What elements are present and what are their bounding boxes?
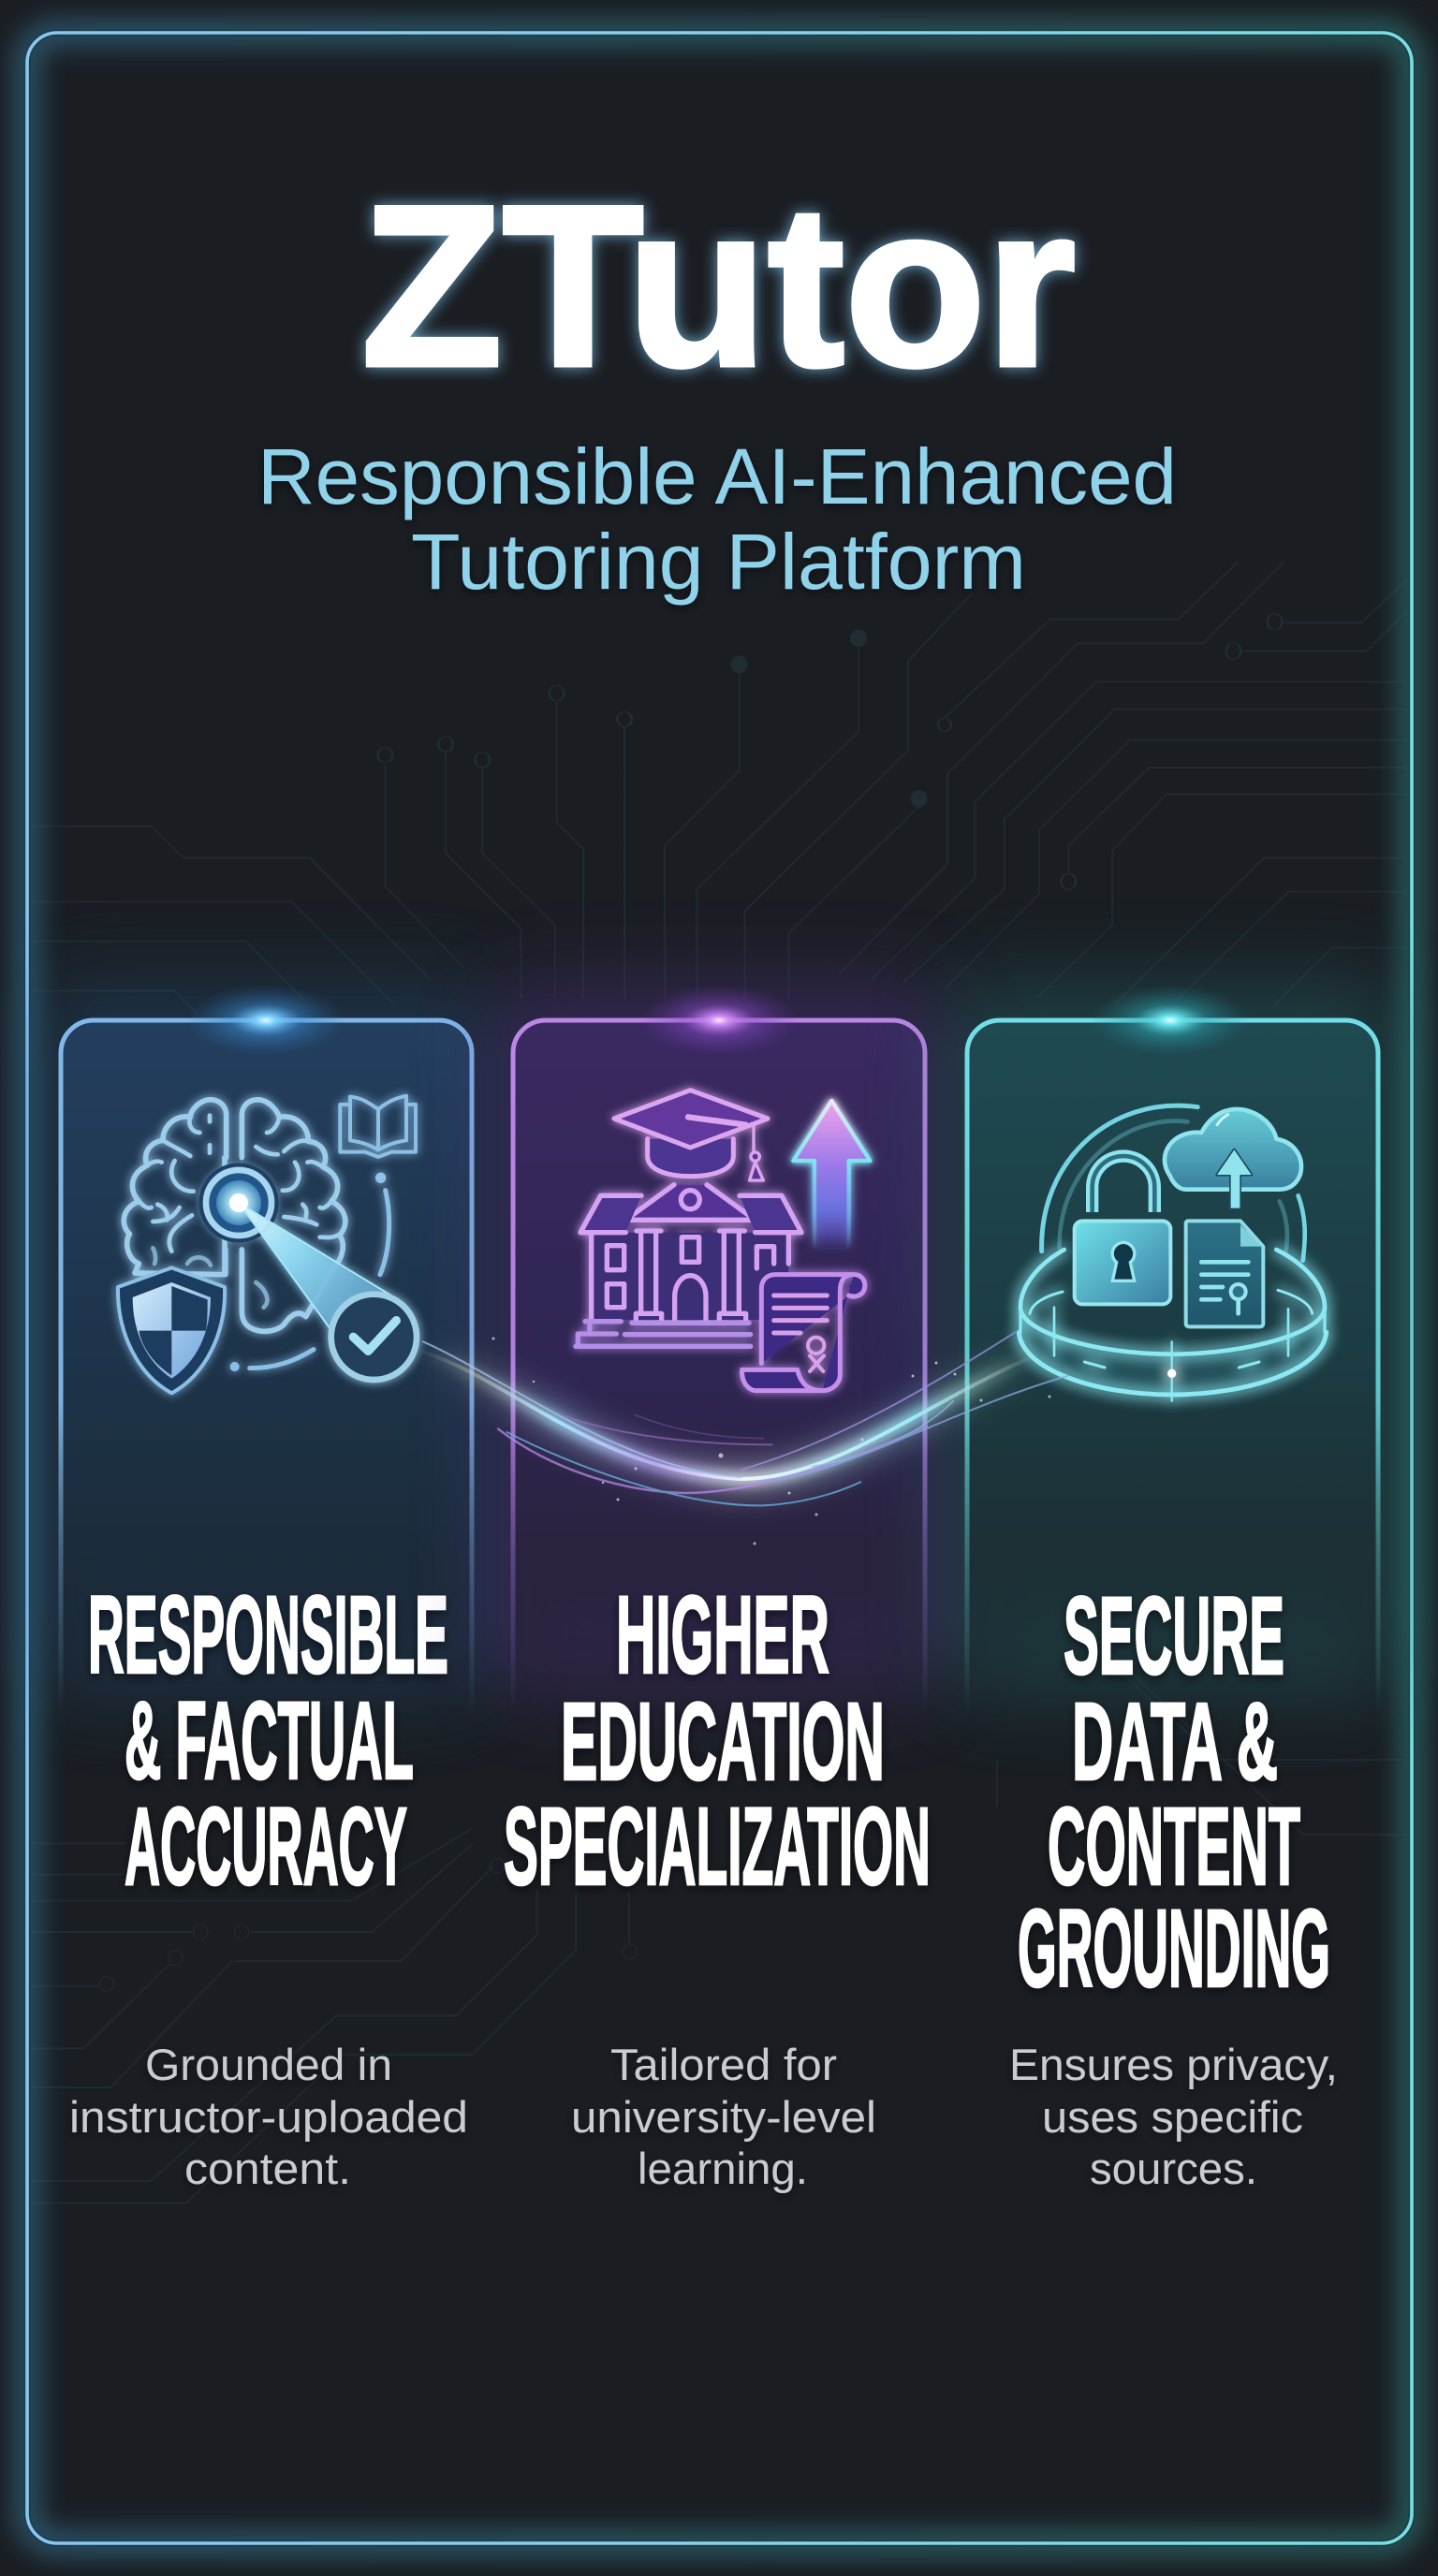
body text: sources. bbox=[1090, 2144, 1257, 2193]
panel: responsible & factual accuracy: RESPONSIBLE bbox=[88, 1573, 448, 1697]
body text: Tailored for bbox=[610, 2040, 837, 2089]
diploma bbox=[742, 1275, 865, 1391]
heading: EDUCATION bbox=[561, 1680, 885, 1804]
subtitle bbox=[257, 432, 1177, 606]
heading bbox=[1018, 1574, 1330, 2011]
heading bbox=[88, 1573, 448, 1909]
icon: university with cap, arrow and diploma bbox=[576, 1090, 870, 1391]
panel: secure data & content grounding bbox=[946, 983, 1401, 2193]
beam bbox=[239, 1203, 390, 1334]
shield bbox=[118, 1267, 225, 1393]
body text: uses specific bbox=[1042, 2092, 1303, 2142]
body text: instructor-uploaded bbox=[69, 2092, 468, 2142]
body text bbox=[69, 2040, 468, 2193]
icon: lock, document and cloud in a ring bbox=[1019, 1105, 1327, 1401]
heading: & FACTUAL bbox=[125, 1679, 414, 1803]
particles bbox=[492, 1337, 1050, 1544]
dome arcs bbox=[1042, 1105, 1305, 1261]
icon: brain with shield, book and check bbox=[118, 1096, 417, 1393]
panel: higher education specialization bbox=[492, 983, 946, 2193]
arrow bbox=[793, 1101, 870, 1250]
body text: content. bbox=[184, 2144, 351, 2193]
card 3 frame bbox=[946, 983, 1401, 1713]
panel: responsible & factual accuracy bbox=[37, 983, 496, 2193]
text: SPECIALIZATION bbox=[504, 1785, 931, 1909]
body text: university-level bbox=[571, 2092, 876, 2142]
body text bbox=[571, 2040, 876, 2193]
graduation cap bbox=[614, 1090, 768, 1180]
card 2 frame bbox=[492, 983, 946, 1713]
document bbox=[1186, 1221, 1263, 1326]
building bbox=[576, 1185, 801, 1346]
title: ZTutor bbox=[361, 157, 1076, 414]
body text bbox=[1009, 2040, 1338, 2193]
heading: HIGHER bbox=[616, 1573, 829, 1697]
cloud bbox=[1165, 1109, 1301, 1190]
heading: ACCURACY bbox=[125, 1785, 407, 1909]
padlock bbox=[1075, 1156, 1170, 1304]
circuit board background pattern bbox=[31, 562, 1406, 2203]
body text: Ensures privacy, bbox=[1009, 2040, 1338, 2089]
light wave connecting the cards bbox=[418, 1332, 1067, 1544]
card 1 frame bbox=[37, 983, 496, 1713]
book bbox=[340, 1096, 416, 1157]
heading bbox=[504, 1573, 931, 1909]
subtitle: Tutoring Platform bbox=[411, 518, 1026, 606]
body text: learning. bbox=[638, 2144, 808, 2193]
subtitle: Responsible AI-Enhanced bbox=[257, 432, 1177, 520]
body text: Grounded in bbox=[145, 2040, 392, 2089]
ring band bbox=[1019, 1308, 1325, 1395]
ring bbox=[1019, 1250, 1327, 1401]
